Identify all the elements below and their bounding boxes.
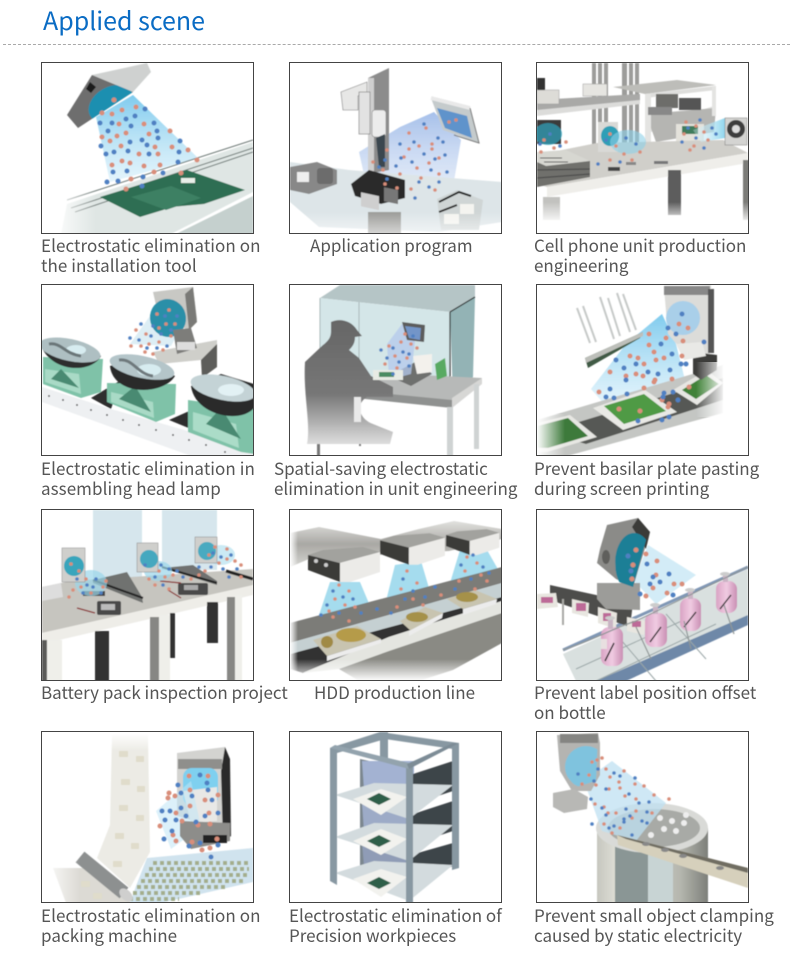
caption: the installation tool [41, 252, 197, 277]
caption: during screen printing [534, 475, 709, 500]
illustration: workbench with shelves and three ionizers [536, 62, 749, 234]
caption [534, 455, 759, 500]
panel: electrostatic elimination of precision workpieces [289, 731, 502, 947]
illustration: inspection table with three ionizers [41, 509, 254, 681]
caption: Prevent small object clamping [534, 902, 774, 927]
panel: electrostatic elimination in assembling head lamp [41, 284, 255, 500]
caption: Prevent basilar plate pasting [534, 455, 759, 480]
caption: Battery pack inspection project [41, 679, 288, 704]
caption [41, 455, 255, 500]
panel: prevent label position offset on bottle [534, 509, 756, 724]
illustration: ionizer above circuit board on rails [41, 62, 254, 234]
panel: prevent basilar plate pasting during screen printing [534, 284, 759, 500]
caption: engineering [534, 252, 628, 277]
caption: assembling head lamp [41, 475, 221, 500]
caption: Electrostatic elimination in [41, 455, 255, 480]
caption: HDD production line [314, 679, 475, 704]
illustration: steel rack with shelves of circuit boards [289, 731, 502, 903]
caption [41, 902, 261, 947]
caption: elimination in unit engineering [274, 475, 518, 500]
caption [289, 902, 502, 947]
panel: battery pack inspection project [41, 509, 288, 704]
caption: packing machine [41, 922, 177, 947]
caption [534, 679, 756, 724]
caption [534, 232, 746, 277]
title: Applied scene [43, 2, 205, 38]
caption [274, 455, 518, 500]
panel: electrostatic elimination on packing machine [41, 731, 261, 947]
caption [534, 902, 774, 947]
panel: HDD production line [289, 509, 502, 704]
illustration: gantry head and ionizer over conveyor [289, 62, 502, 234]
caption: Electrostatic elimination on [41, 902, 261, 927]
caption: Precision workpieces [289, 922, 456, 947]
panel: electrostatic elimination on the installation tool [41, 62, 261, 277]
illustration: head lamp reflectors on conveyor [41, 284, 254, 456]
illustration: overhead ionizers above hard disks on belt [289, 509, 502, 681]
panel: cell phone unit production engineering [534, 62, 749, 277]
caption: on bottle [534, 699, 606, 724]
illustration: vibratory feeder bowl with chute and ionizer [536, 731, 749, 903]
caption: Spatial-saving electrostatic [274, 455, 488, 480]
illustration: operator silhouette at glass enclosure [289, 284, 502, 456]
caption [41, 232, 261, 277]
caption: Prevent label position offset [534, 679, 756, 704]
illustration: screen printing plate and circuit boards [536, 284, 749, 456]
caption: Electrostatic elimination on [41, 232, 261, 257]
caption: caused by static electricity [534, 922, 742, 947]
illustration: pink bottles on conveyor under ionizer [536, 509, 749, 681]
panel: prevent small object clamping caused by static electricity [534, 731, 774, 947]
panel: application program [289, 62, 502, 257]
illustration: packaging film, roller and ionizer [41, 731, 254, 903]
caption: Electrostatic elimination of [289, 902, 502, 927]
caption: Cell phone unit production [534, 232, 746, 257]
panel: spatial-saving electrostatic elimination in unit engineering [274, 284, 518, 500]
caption: Application program [310, 232, 473, 257]
